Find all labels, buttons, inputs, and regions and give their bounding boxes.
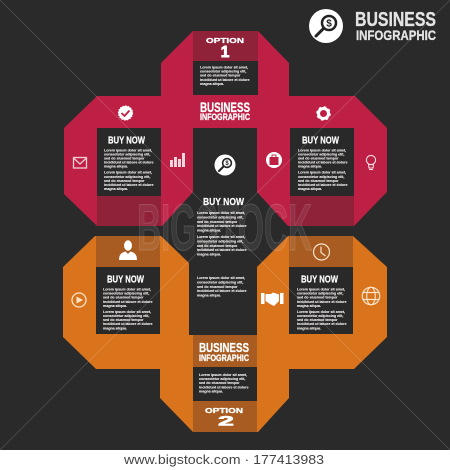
panel: dark text boxes <box>96 61 354 401</box>
right orange text block: sed do eiusmod tempor <box>297 296 338 300</box>
right crimson text block: consectetur adipiscing elit, <box>298 152 344 156</box>
icon: handshake <box>261 292 284 306</box>
centre text block: sed do eiusmod tempor <box>197 244 238 248</box>
centre text block: BUY NOW <box>203 197 244 208</box>
left orange text block: consectetur adipiscing elit, <box>103 314 149 318</box>
left crimson text block: magna aliqua. <box>104 187 128 191</box>
panel: crimson ribbon <box>64 31 387 226</box>
icon: person <box>119 240 137 260</box>
left crimson text block: BUY NOW <box>108 136 145 146</box>
option 2 label: 2 <box>218 412 234 428</box>
left crimson text block: consectetur adipiscing elit, <box>104 175 150 179</box>
left orange text block: sed do eiusmod tempor <box>103 296 144 300</box>
right crimson text block: BUY NOW <box>302 136 339 146</box>
right crimson text block: sed do eiusmod tempor <box>298 179 339 183</box>
footer strip: www.bigstock.com · 177413983 <box>123 453 324 467</box>
icon: magnifier with dollar, centre: $ <box>225 161 229 167</box>
left crimson text block: Lorem ipsum dolor sit amet, <box>104 148 152 152</box>
option 1 label: OPTION <box>206 38 244 45</box>
left crimson text block: consectetur adipiscing elit, <box>104 152 150 156</box>
right crimson text block: magna aliqua. <box>298 187 322 191</box>
centre text block: incididunt ut labore et dolore <box>197 248 247 252</box>
crimson band heading: INFOGRAPHIC <box>200 112 250 123</box>
option 2 text: incididunt ut labore et dolore <box>199 385 249 389</box>
left crimson text block: Lorem ipsum dolor sit amet, <box>104 171 152 175</box>
left orange text block: magna aliqua. <box>103 304 127 308</box>
right orange text block: magna aliqua. <box>297 326 321 330</box>
right orange text block: Lorem ipsum dolor sit amet, <box>297 288 345 292</box>
icon: clock <box>314 244 330 260</box>
left orange text block: BUY NOW <box>107 274 144 286</box>
option 2 text: magna aliqua. <box>199 389 223 393</box>
option 1 text: incididunt ut labore et dolore <box>200 78 250 82</box>
right orange text block: magna aliqua. <box>297 304 321 308</box>
left orange text block: Lorem ipsum dolor sit amet, <box>103 310 151 314</box>
option 2 text: sed do eiusmod tempor <box>199 381 240 385</box>
option 2 text: Lorem ipsum dolor sit amet, <box>199 373 247 377</box>
crimson band heading: BUSINESS <box>200 99 250 115</box>
left orange text block: magna aliqua. <box>103 326 127 330</box>
right crimson text block: incididunt ut labore et dolore <box>298 161 348 165</box>
centre lower text block: Lorem ipsum dolor sit amet, <box>197 276 245 280</box>
option 2 label <box>205 408 243 428</box>
icon: globe <box>362 287 380 305</box>
centre text block: consectetur adipiscing elit, <box>197 215 243 219</box>
right crimson text block: incididunt ut labore et dolore <box>298 183 348 187</box>
right orange text block: Lorem ipsum dolor sit amet, <box>297 310 345 314</box>
icon: suitcase <box>266 152 282 168</box>
orange band heading: INFOGRAPHIC <box>199 353 249 364</box>
centre text block: sed do eiusmod tempor <box>197 220 238 224</box>
left orange text block: incididunt ut labore et dolore <box>103 300 153 304</box>
right orange text block: incididunt ut labore et dolore <box>297 322 347 326</box>
icon: bar chart <box>170 153 185 167</box>
right orange text block: consectetur adipiscing elit, <box>297 292 343 296</box>
right crimson text block: sed do eiusmod tempor <box>298 156 339 160</box>
right orange text block: BUY NOW <box>301 274 338 286</box>
orange band heading <box>199 340 249 364</box>
option 1 text: consectetur adipiscing elit, <box>200 70 246 74</box>
centre lower text block: sed do eiusmod tempor <box>197 285 238 289</box>
orange band heading: BUSINESS <box>199 340 249 355</box>
right crimson text block <box>298 136 348 191</box>
option 2 text: consectetur adipiscing elit, <box>199 377 245 381</box>
title <box>355 9 436 43</box>
icon: light bulb <box>366 155 376 170</box>
icon: magnifier with dollar, header <box>309 9 343 43</box>
icon: mail <box>74 158 86 168</box>
centre lower text block: consectetur adipiscing elit, <box>197 280 243 284</box>
icon: magnifier with dollar, centre <box>214 154 236 176</box>
left orange text block <box>103 274 153 330</box>
left crimson text block: magna aliqua. <box>104 165 128 169</box>
icon: play button <box>72 293 86 307</box>
option 2 label: OPTION <box>205 408 243 415</box>
option 1 label <box>206 38 244 61</box>
right crimson text block: Lorem ipsum dolor sit amet, <box>298 171 346 175</box>
right crimson text block: magna aliqua. <box>298 165 322 169</box>
panel: orange ribbon <box>63 236 387 432</box>
right orange text block: incididunt ut labore et dolore <box>297 300 347 304</box>
right orange text block: sed do eiusmod tempor <box>297 318 338 322</box>
left orange text block: sed do eiusmod tempor <box>103 318 144 322</box>
centre text block: Lorem ipsum dolor sit amet, <box>197 211 245 215</box>
footer strip <box>0 450 450 470</box>
option 1 text: Lorem ipsum dolor sit amet, <box>200 66 248 70</box>
right orange text block: consectetur adipiscing elit, <box>297 314 343 318</box>
centre lower text block: magna aliqua. <box>197 294 221 298</box>
icon: magnifier with dollar, header: $ <box>326 18 332 30</box>
option 1 text: magna aliqua. <box>200 82 224 86</box>
centre text block: Lorem ipsum dolor sit amet, <box>197 235 245 239</box>
centre text block <box>197 197 247 257</box>
left orange text block: incididunt ut labore et dolore <box>103 322 153 326</box>
left crimson text block: sed do eiusmod tempor <box>104 156 145 160</box>
left crimson text block: incididunt ut labore et dolore <box>104 161 154 165</box>
centre text block: consectetur adipiscing elit, <box>197 239 243 243</box>
option 1 text: sed do eiusmod tempor <box>200 74 241 78</box>
left crimson text block <box>104 136 154 191</box>
crimson band heading <box>200 99 250 123</box>
right crimson text block: Lorem ipsum dolor sit amet, <box>298 148 346 152</box>
centre lower text block: incididunt ut labore et dolore <box>197 289 247 293</box>
left orange text block: consectetur adipiscing elit, <box>103 292 149 296</box>
right orange text block <box>297 274 347 330</box>
icon: gear <box>317 107 330 120</box>
left orange text block: Lorem ipsum dolor sit amet, <box>103 288 151 292</box>
centre text block: magna aliqua. <box>197 253 221 257</box>
left crimson text block: sed do eiusmod tempor <box>104 179 145 183</box>
centre text block: magna aliqua. <box>197 229 221 233</box>
icon: check badge <box>118 106 132 120</box>
option 1 label: 1 <box>221 44 230 61</box>
centre text block: incididunt ut labore et dolore <box>197 224 247 228</box>
left crimson text block: incididunt ut labore et dolore <box>104 183 154 187</box>
right crimson text block: consectetur adipiscing elit, <box>298 175 344 179</box>
